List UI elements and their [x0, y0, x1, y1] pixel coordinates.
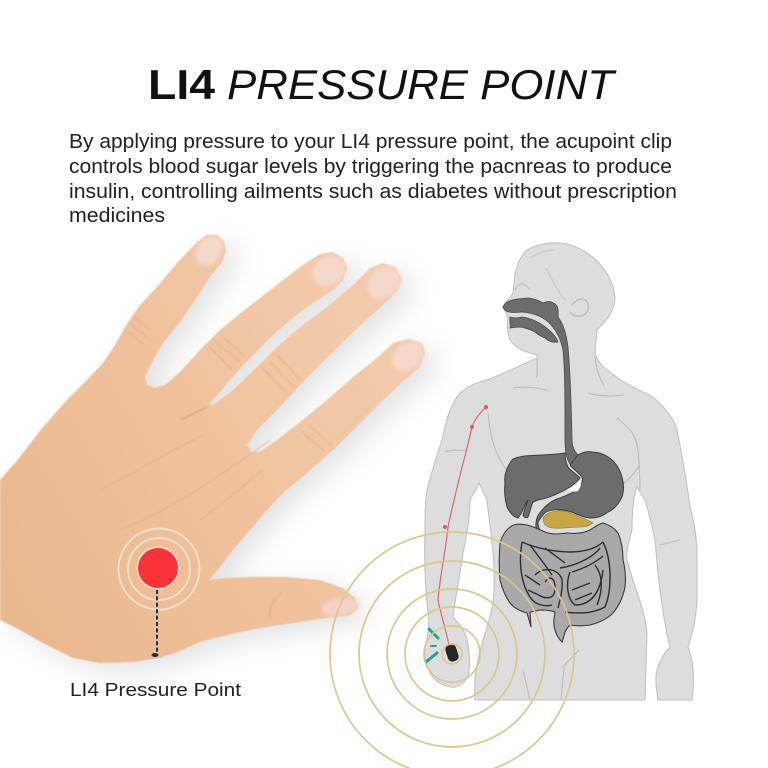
hand illustration [0, 231, 437, 671]
text block: description: insulin, controlling ailments such as diabetes without prescription [69, 181, 677, 203]
acupoint clip on hand [426, 629, 460, 663]
stomach and liver [505, 452, 624, 535]
pressure point marker [118, 528, 200, 610]
body figure [425, 243, 697, 700]
knuckle creases [100, 315, 332, 620]
text block: description: By applying pressure to your LI4 pressure point, the acupoint clip [69, 131, 672, 153]
body contour lines [445, 250, 680, 700]
title: LI4 [148, 61, 216, 108]
leader line [152, 590, 158, 657]
label: LI4 Pressure Point: LI4 Pressure Point [70, 679, 241, 700]
signal rings [330, 532, 574, 768]
title: PRESSURE POINT [227, 61, 617, 108]
body silhouette [425, 243, 697, 700]
esophagus and mouth [503, 298, 578, 466]
text block: description: medicines [69, 205, 165, 227]
meridian line on arm [438, 405, 488, 645]
text block: description [69, 131, 677, 227]
intestines [499, 523, 625, 642]
pancreas [543, 511, 593, 528]
text block: description: controls blood sugar levels by triggering the pacnreas to produce [69, 156, 672, 178]
fingernails [190, 231, 429, 619]
